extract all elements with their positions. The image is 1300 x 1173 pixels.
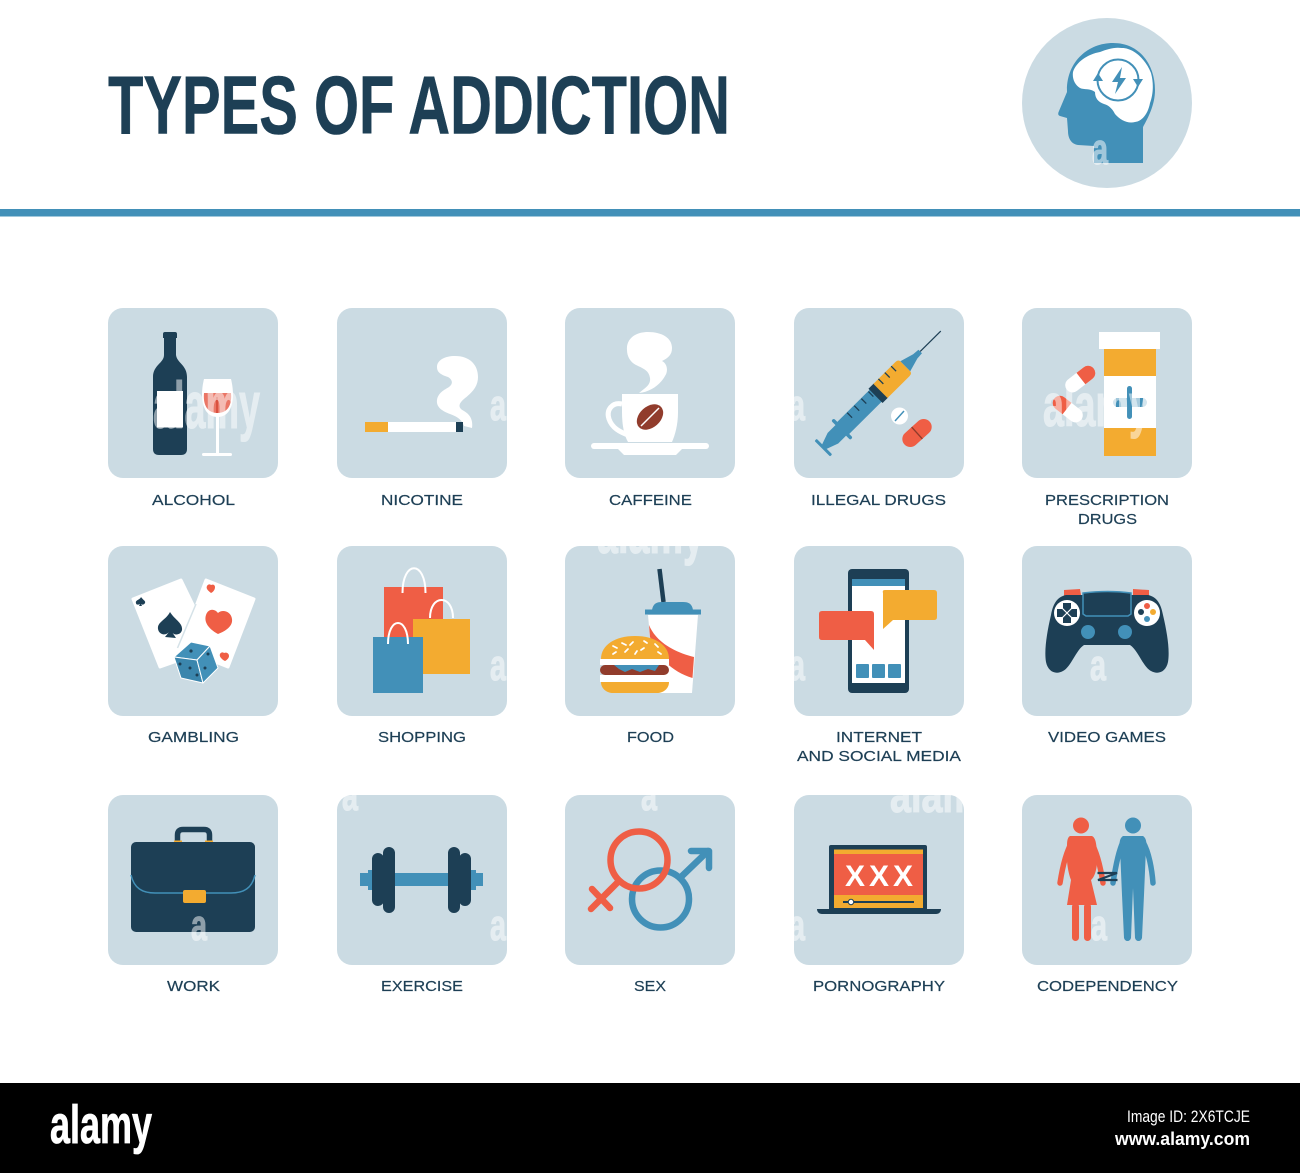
panel: video games xyxy=(1022,546,1192,746)
icon: red capsule xyxy=(899,416,935,450)
icon: spade card xyxy=(133,580,214,667)
watermarks: alamy xyxy=(1043,372,1150,439)
watermarks: a xyxy=(789,641,805,690)
watermarks: a xyxy=(490,381,506,430)
label: work: WORK xyxy=(167,978,220,995)
panel: internet and social media xyxy=(794,546,964,765)
label: food: FOOD xyxy=(627,729,674,746)
icon: head with brain and energy cycle xyxy=(1022,18,1192,188)
watermarks: a xyxy=(490,641,506,690)
panel: caffeine xyxy=(565,308,735,509)
icon: man xyxy=(1113,818,1153,941)
icon: briefcase xyxy=(131,830,255,932)
icon: chain between hands xyxy=(1098,873,1118,880)
icon: syringe xyxy=(813,321,950,458)
watermarks: a xyxy=(191,901,207,950)
label: exercise: EXERCISE xyxy=(381,978,463,995)
panel: prescription drugs xyxy=(1022,308,1192,528)
label: caffeine: CAFFEINE xyxy=(609,492,692,509)
footer band xyxy=(0,1083,1300,1173)
watermarks: a xyxy=(1091,901,1107,950)
icon: coffee cup xyxy=(608,394,678,442)
icon: male symbol xyxy=(632,851,709,928)
icon: smoke xyxy=(437,356,478,428)
icon: drink cup xyxy=(645,569,701,693)
panel: work xyxy=(108,795,278,995)
label: internet and social media: AND SOCIAL MEDIA xyxy=(797,748,961,765)
icon: yellow bag xyxy=(413,600,470,674)
label: prescription drugs xyxy=(1045,492,1169,528)
icon: yellow chat bubble xyxy=(883,590,937,629)
label: prescription drugs: PRESCRIPTION xyxy=(1045,492,1169,509)
icon: woman xyxy=(1060,818,1103,941)
watermarks: a xyxy=(490,901,506,950)
icon: dumbbell xyxy=(360,847,483,913)
panel: nicotine xyxy=(337,308,507,509)
icon: heart card xyxy=(178,580,254,667)
icon: capsules xyxy=(1050,363,1098,425)
footer logo: alamy xyxy=(50,1095,152,1155)
watermarks: alamy xyxy=(153,368,260,442)
watermarks: a xyxy=(641,771,657,820)
label: video games: VIDEO GAMES xyxy=(1048,729,1166,746)
icon: wine bottle xyxy=(153,332,187,455)
title: TYPES OF ADDICTION xyxy=(108,58,730,152)
label: internet and social media: INTERNET xyxy=(836,729,922,746)
icon: red bag xyxy=(384,568,443,642)
icon: laptop: XXX xyxy=(845,860,913,893)
bottle label xyxy=(157,391,183,428)
icon: wine glass xyxy=(202,379,233,456)
label: pornography: PORNOGRAPHY xyxy=(813,978,945,995)
label: internet and social media xyxy=(797,729,961,765)
panel: pornography xyxy=(794,795,964,995)
header divider xyxy=(0,209,1300,216)
icon: pill bottle xyxy=(1099,332,1160,456)
label: prescription drugs: DRUGS xyxy=(1078,511,1137,528)
icon: die xyxy=(174,642,218,683)
icon: female symbol xyxy=(591,832,668,909)
label: codependency: CODEPENDENCY xyxy=(1037,978,1178,995)
watermarks: a xyxy=(789,381,805,430)
label: alcohol: ALCOHOL xyxy=(152,492,235,509)
watermarks: alamy xyxy=(597,499,704,566)
icon: smartphone xyxy=(848,569,909,693)
panel: shopping xyxy=(337,546,507,746)
website: www.alamy.com xyxy=(1114,1129,1250,1149)
panel: illegal drugs xyxy=(794,308,964,509)
icon: saucer xyxy=(591,443,709,455)
panel: food xyxy=(565,546,735,746)
icon: laptop xyxy=(817,845,941,914)
watermarks: a xyxy=(789,901,805,950)
watermarks: a xyxy=(1092,125,1108,174)
icon: blue bag xyxy=(373,623,423,693)
watermarks: alamy xyxy=(890,767,997,823)
image id: Image ID: 2X6TCJE xyxy=(1127,1107,1250,1126)
watermarks: a xyxy=(342,771,358,820)
icon: steam xyxy=(627,332,672,393)
label: illegal drugs: ILLEGAL DRUGS xyxy=(811,492,946,509)
panel: exercise xyxy=(337,795,507,995)
icon: cigarette xyxy=(365,422,463,432)
die pips xyxy=(178,649,210,676)
icon: white tablet xyxy=(891,408,908,424)
panel: codependency xyxy=(1022,795,1192,995)
label: shopping: SHOPPING xyxy=(378,729,466,746)
panel: sex xyxy=(565,795,735,995)
icon: red chat bubble xyxy=(819,611,874,650)
label: nicotine: NICOTINE xyxy=(381,492,463,509)
watermarks xyxy=(153,125,1150,950)
label: sex: SEX xyxy=(634,978,666,995)
icon: burger xyxy=(600,636,669,693)
watermarks: a xyxy=(1090,641,1106,690)
label: gambling: GAMBLING xyxy=(148,729,239,746)
panel: alcohol xyxy=(108,308,278,509)
panel: gambling xyxy=(108,546,278,746)
icon: game controller xyxy=(1045,589,1169,673)
